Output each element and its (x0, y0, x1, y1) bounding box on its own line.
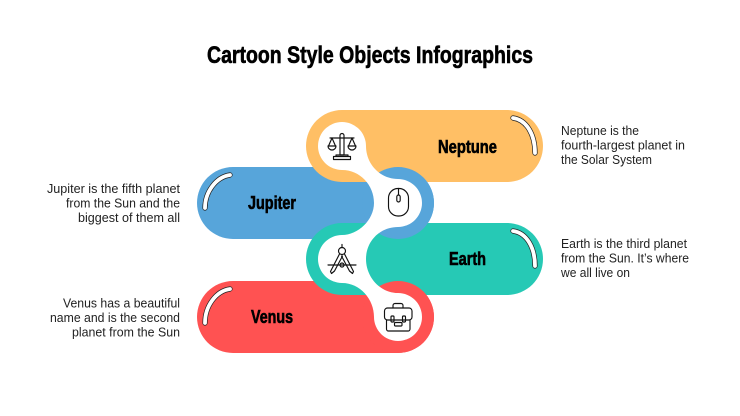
white connector channel (318, 122, 422, 341)
label: Venus: Venus (251, 307, 293, 327)
label: Neptune: Neptune (438, 137, 497, 157)
text: Jupiter description (47, 182, 181, 225)
highlight: Venus (205, 289, 230, 323)
text: Venus description: name and is the second (50, 311, 180, 325)
icon: scales (328, 134, 356, 160)
highlight: Earth (513, 231, 535, 266)
text: Venus description: planet from the Sun (72, 326, 180, 340)
label: Earth: Earth (449, 249, 486, 269)
text: Venus description (50, 296, 180, 340)
text: Jupiter description: from the Sun and the (66, 196, 180, 210)
text: Earth description (560, 237, 689, 280)
label: Jupiter: Jupiter (248, 193, 296, 213)
highlight: Jupiter (205, 175, 230, 208)
text: Venus description: Venus has a beautiful (63, 296, 180, 310)
text: Jupiter description: biggest of them all (78, 211, 180, 225)
highlight: Neptune (513, 118, 535, 153)
pill: Venus (197, 281, 434, 353)
text: Neptune description: fourth-largest planet in (561, 138, 685, 152)
icon: mouse (388, 188, 408, 216)
text: Neptune description: Neptune is the (561, 124, 639, 138)
Venus pill end cap (362, 281, 434, 353)
Jupiter pill end cap (362, 167, 434, 239)
text: Neptune description (561, 124, 685, 167)
text: Jupiter description: Jupiter is the fifth planet (47, 182, 181, 196)
pill: Earth (306, 223, 543, 295)
text: Neptune description: the Solar System (561, 153, 652, 167)
pill: Neptune (306, 110, 543, 182)
icon: briefcase (384, 304, 412, 331)
central pill diagram (197, 110, 543, 353)
pill: Jupiter (197, 167, 434, 239)
text: Earth description: from the Sun. It’s where (561, 252, 689, 266)
icon: compass (328, 244, 356, 274)
text: Earth description: we all live on (560, 266, 630, 280)
title: Cartoon Style Objects Infographics (207, 42, 533, 69)
text: Earth description: Earth is the third planet (561, 237, 688, 251)
